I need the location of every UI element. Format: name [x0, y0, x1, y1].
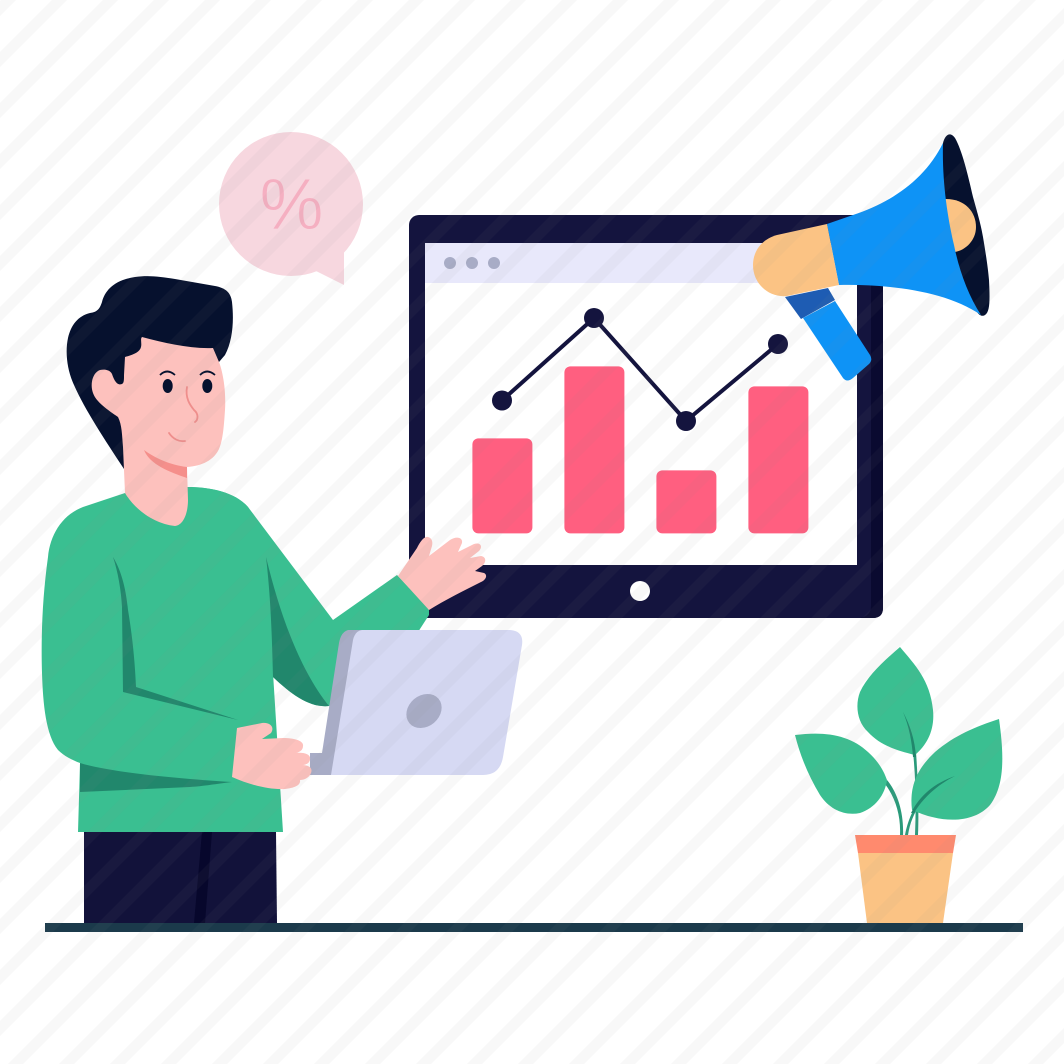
leaf veins: [903, 712, 955, 813]
neck and face: [92, 337, 225, 526]
speech bubble with percent: [219, 132, 363, 285]
screen: [425, 243, 857, 565]
potted plant: [795, 647, 1002, 923]
laptop: [310, 630, 522, 775]
megaphone body: [753, 224, 839, 296]
monitor with chart: [409, 215, 883, 618]
megaphone handle: [785, 288, 871, 380]
sweater shadow: sleeve: [80, 763, 232, 792]
trousers: [84, 832, 277, 923]
hair: [67, 276, 233, 469]
megaphone speaker: [935, 199, 976, 252]
percent sign: %: [259, 165, 324, 245]
eyes: [160, 372, 215, 393]
right leaf: [911, 719, 1002, 820]
sweater: [42, 487, 329, 832]
stems: [885, 752, 920, 835]
bar chart: [472, 366, 808, 533]
sweater shadow: underarm: [266, 557, 329, 706]
laptop lid: [331, 630, 522, 775]
laptop logo: [399, 687, 449, 735]
laptop back: [310, 630, 370, 775]
ground line: [45, 923, 1023, 932]
browser bar: [425, 243, 857, 283]
left leaf: [795, 734, 887, 814]
nose: [187, 387, 198, 422]
line chart: [492, 308, 788, 431]
megaphone mouth: [930, 134, 990, 316]
person: [42, 276, 522, 923]
monitor frame: [409, 215, 883, 618]
home button: [630, 581, 650, 601]
neck shadow: [144, 450, 187, 478]
sweater shadow: arm fold: [113, 557, 238, 720]
pot: [855, 835, 956, 923]
megaphone: [753, 134, 990, 380]
holding hand: [232, 723, 312, 789]
raised hand: [398, 537, 486, 610]
top leaf: [857, 647, 933, 755]
raised arm sleeve: [187, 487, 429, 706]
megaphone horn: [827, 143, 981, 315]
mouth: [169, 433, 185, 441]
